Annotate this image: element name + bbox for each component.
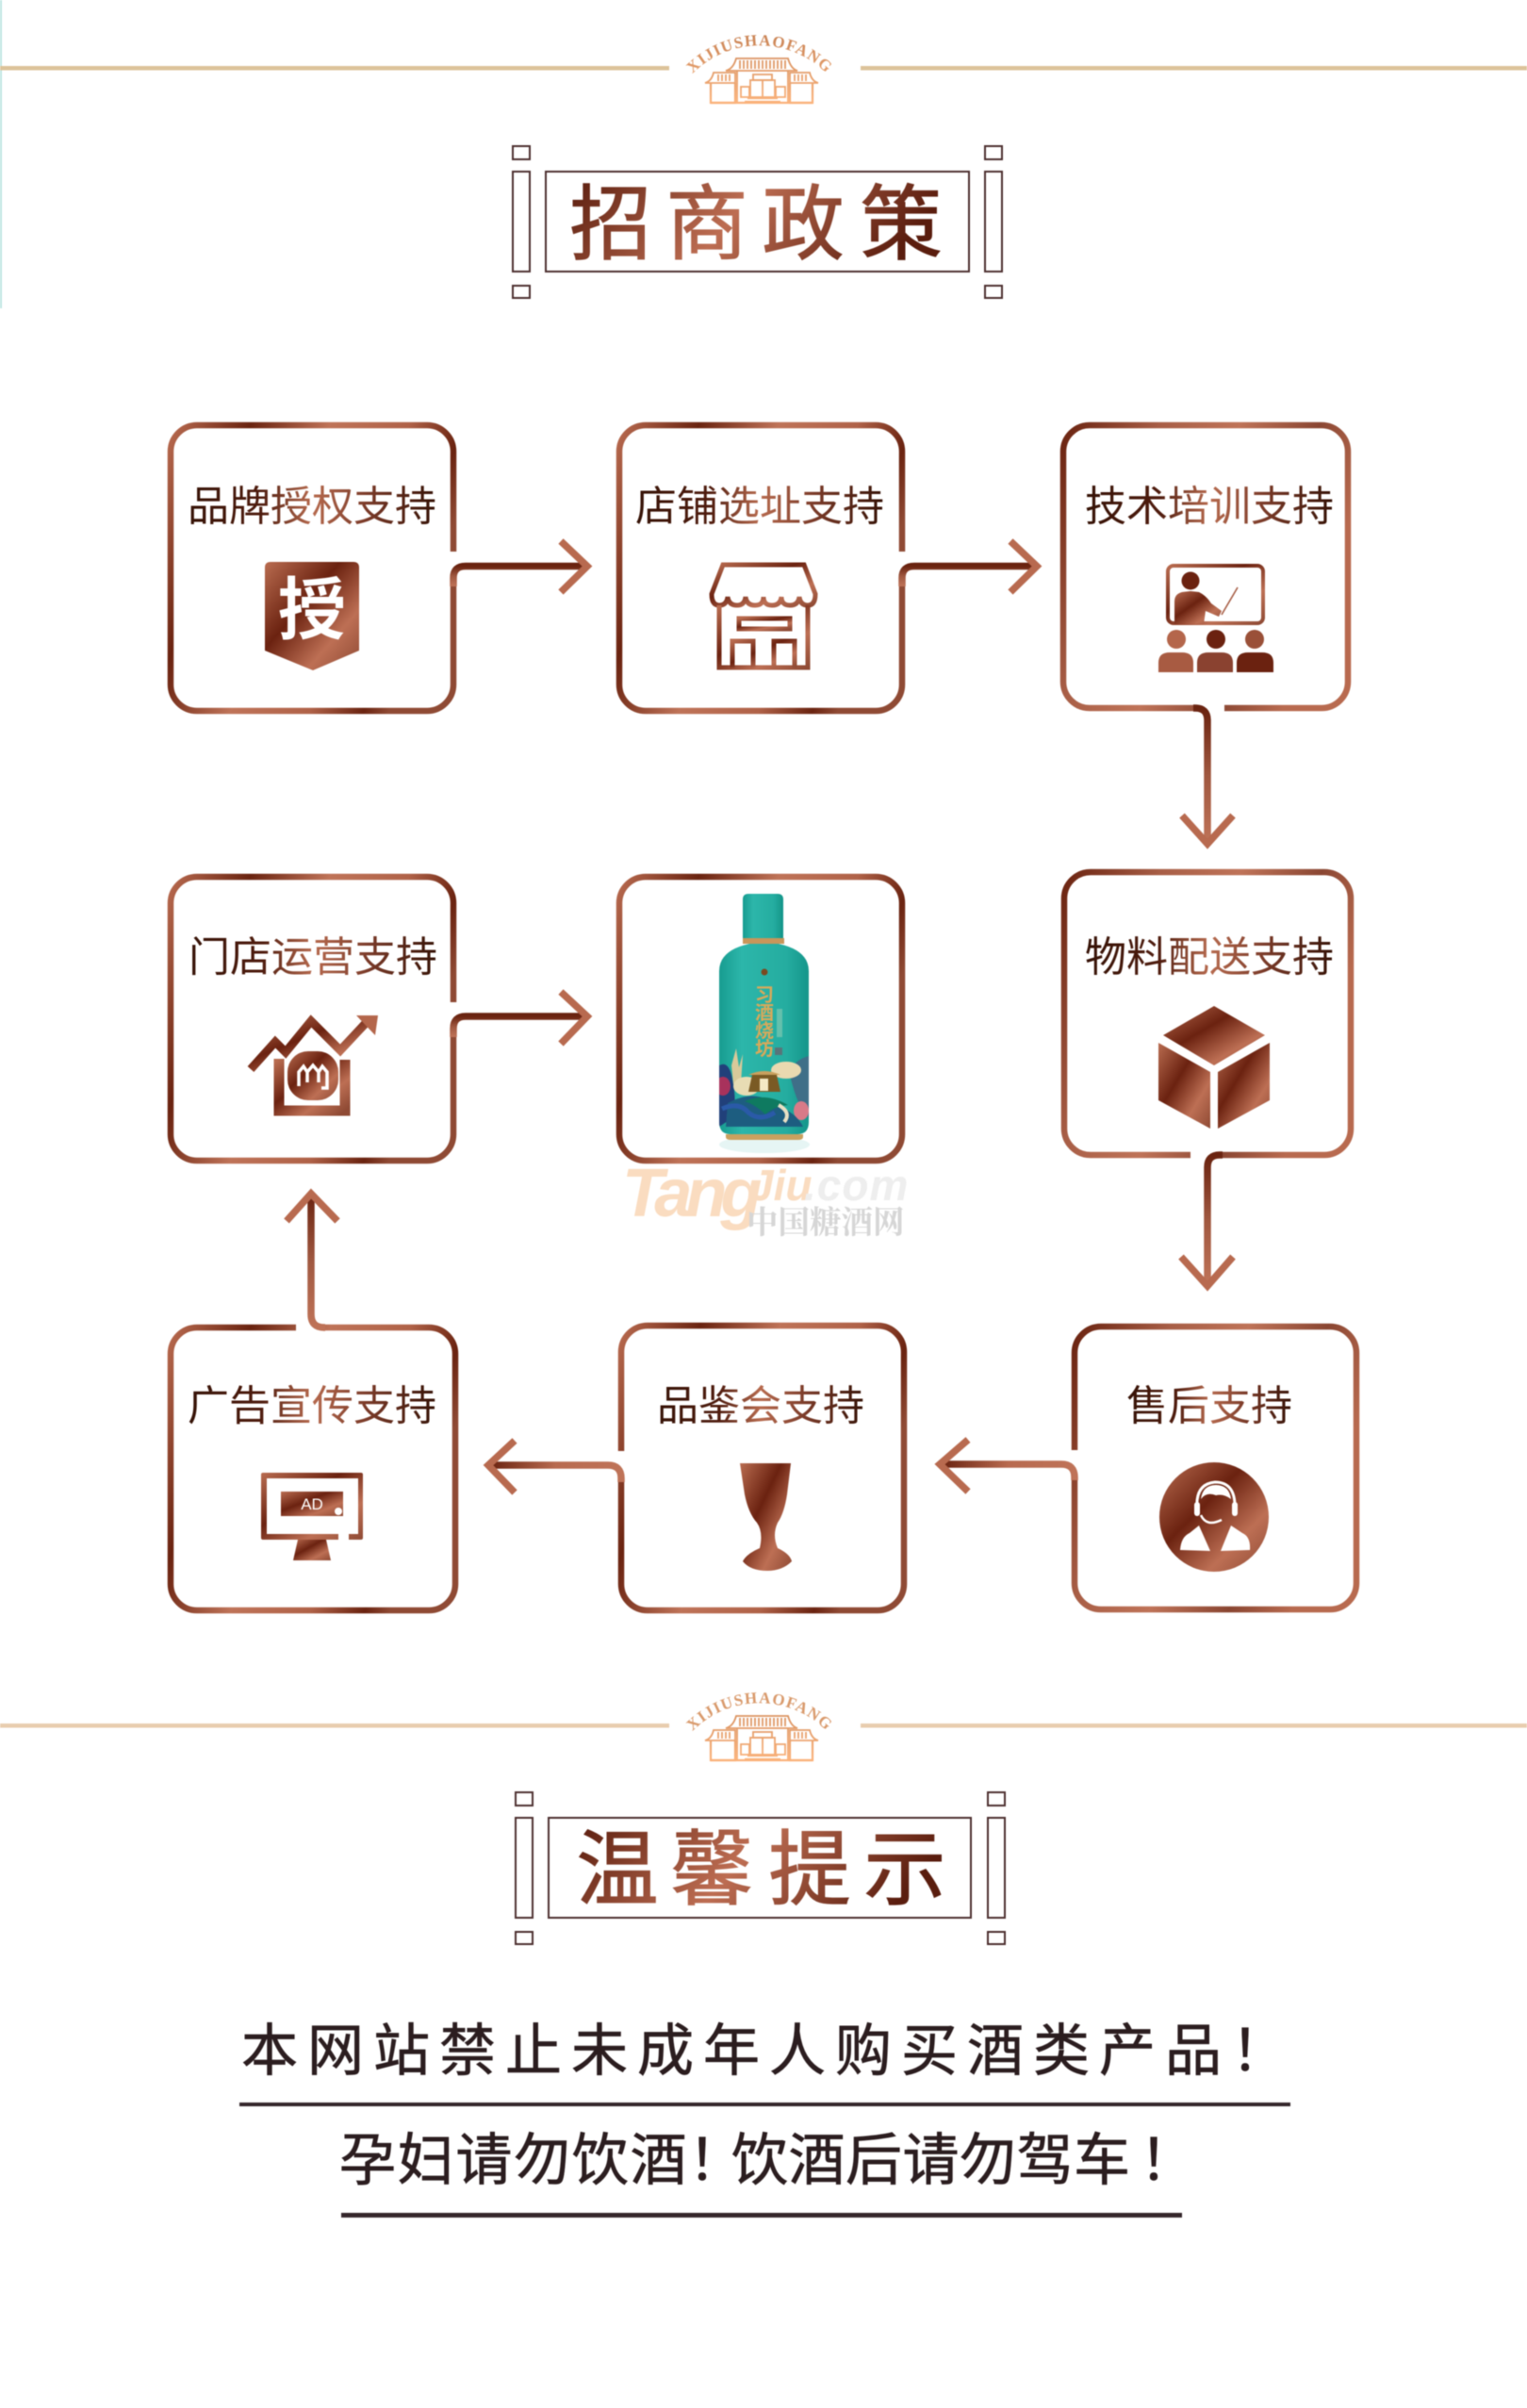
warning text line 2: ！	[688, 2129, 745, 2192]
logo wordmark: XIJIUSHAOFANG	[685, 1691, 831, 1731]
card border	[1063, 425, 1348, 708]
icon: wine goblet	[740, 1463, 792, 1571]
watermark: tangjiu.com: 中国糖酒网	[747, 1206, 905, 1241]
title frame: 招商政策	[513, 146, 1002, 298]
panel: product bottle	[619, 877, 902, 1161]
card border	[171, 877, 453, 1161]
underline 1	[239, 2103, 1290, 2106]
panel: 售后支持	[1075, 1327, 1356, 1609]
panel: 广告宣传支持	[171, 1328, 455, 1610]
left edge sliver	[0, 0, 2, 308]
icon: authorization shield	[265, 562, 359, 670]
bottle label text	[755, 985, 774, 1060]
icon: AD monitor: AD	[301, 1495, 323, 1513]
panel: 品鉴会支持	[621, 1326, 904, 1610]
warning text line 2: 饮酒后请勿驾车	[731, 2129, 1131, 2192]
arrow: card 1 to card 2	[453, 541, 587, 592]
icon: customer service	[1159, 1462, 1269, 1572]
underline 2	[341, 2213, 1182, 2218]
label: 广告宣传支持	[188, 1383, 436, 1429]
bottle reflection	[719, 1136, 810, 1153]
warning text line 1: 本网站禁止未成年人购买酒类产品！	[241, 2020, 1297, 2083]
frame squares and bars	[513, 146, 1002, 298]
logo wordmark: XIJIUSHAOFANG	[685, 34, 831, 74]
label: 店铺选址支持	[635, 484, 884, 530]
title text: 招商政策	[569, 179, 943, 271]
arrow: card 4 to bottle card	[453, 992, 587, 1044]
label: 品牌授权支持	[188, 484, 436, 530]
bottle label text: 坊	[755, 1037, 774, 1060]
divider with logo: top	[0, 34, 1527, 105]
logo building	[705, 1716, 818, 1760]
title text: 温馨提示	[577, 1824, 946, 1916]
panel: 物料配送支持	[1064, 872, 1351, 1155]
arrow: card 6 to card 9	[1181, 1155, 1233, 1286]
card border	[621, 1326, 904, 1610]
warning text line 2: 孕妇请勿饮酒	[339, 2129, 688, 2192]
arrow: card 8 to card 7	[488, 1441, 621, 1493]
title frame: 温馨提示	[516, 1792, 1005, 1944]
icon: AD monitor	[261, 1473, 363, 1560]
icon: cube	[1158, 1006, 1270, 1129]
arrow: card 9 to card 8	[940, 1440, 1075, 1492]
label: 门店运营支持	[189, 934, 437, 981]
label: 品鉴会支持	[657, 1383, 864, 1429]
frame squares and bars	[516, 1792, 1005, 1944]
label: 技术培训支持	[1085, 484, 1334, 530]
icon: storefront	[712, 565, 815, 668]
watermark: tangjiu.com: Tang	[622, 1156, 761, 1231]
icon: teacher and students	[1158, 566, 1273, 672]
panel: 店铺选址支持	[619, 425, 902, 711]
divider line left	[0, 1724, 669, 1727]
panel: 品牌授权支持	[171, 425, 453, 711]
watermark: tangjiu.com	[622, 1156, 909, 1241]
divider line right	[861, 66, 1527, 70]
arrow: card 2 to card 3	[902, 541, 1037, 592]
card border	[1064, 872, 1351, 1155]
logo building	[705, 58, 818, 103]
warning text line 2	[339, 2129, 1196, 2192]
card border	[171, 1328, 455, 1610]
bottle	[715, 894, 809, 1140]
card border	[619, 425, 902, 711]
divider line right	[861, 1724, 1527, 1727]
label: 售后支持	[1126, 1383, 1292, 1429]
divider with logo: bottom	[0, 1691, 1527, 1762]
panel: 技术培训支持	[1063, 425, 1348, 708]
warning text line 2: ！	[1140, 2129, 1196, 2192]
icon: authorization shield: 授	[278, 573, 346, 649]
card border	[619, 877, 902, 1161]
card border	[171, 425, 453, 711]
bottle label text: 酒	[755, 1002, 774, 1024]
icon: store growth	[251, 1015, 378, 1111]
bottle label text: 习	[755, 985, 774, 1006]
arrow: card 7 to card 4	[287, 1194, 337, 1328]
bottle illustration	[715, 1048, 809, 1127]
bottle label text: 烧	[755, 1020, 774, 1042]
arrow: card 3 to card 6	[1182, 708, 1233, 844]
card border	[1075, 1327, 1356, 1609]
watermark: tangjiu.com: Jiu	[749, 1161, 812, 1210]
divider line left	[0, 66, 669, 70]
label: 物料配送支持	[1085, 934, 1334, 981]
watermark: tangjiu.com: .com	[804, 1161, 909, 1210]
panel: 门店运营支持	[171, 877, 453, 1161]
